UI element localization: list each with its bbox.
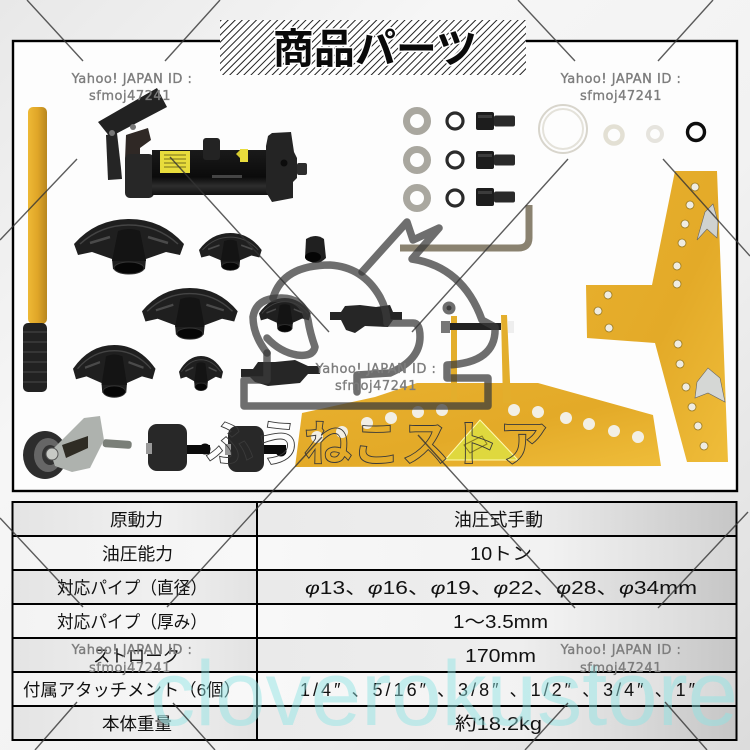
table values: 10トン (470, 544, 532, 564)
hydraulic cylinder pump (98, 88, 307, 202)
table labels: 本体重量 (102, 714, 172, 734)
parts photo panel (13, 41, 737, 491)
table values: 170mm (465, 646, 536, 666)
store name watermark: cloverokustore (150, 643, 738, 745)
table labels: 付属アタッチメント（6個） (23, 680, 241, 700)
Yahoo ID watermarks: Yahoo! JAPAN ID : (315, 362, 436, 377)
Yahoo ID watermarks (71, 72, 681, 676)
clear seal rings (539, 105, 704, 153)
bushing (305, 236, 326, 263)
Yahoo ID watermarks: sfmoj47241 (89, 661, 171, 676)
washers o-rings bolts (406, 110, 515, 208)
table labels: 対応パイプ（直径） (57, 578, 207, 598)
handle bar (23, 107, 47, 392)
Yahoo ID watermarks: sfmoj47241 (89, 89, 171, 104)
table labels: ストローク (93, 646, 180, 666)
Yahoo ID watermarks: Yahoo! JAPAN ID : (71, 72, 192, 87)
roller wheels (146, 424, 286, 472)
caster wheel (23, 416, 132, 479)
T-shaped yellow plate (586, 171, 728, 462)
table values: 約18.2kg (455, 714, 542, 734)
hex key (400, 205, 529, 248)
store name outline watermark: ふうねこストア (205, 418, 548, 472)
Yahoo ID watermarks: sfmoj47241 (580, 89, 662, 104)
bending dies (73, 219, 311, 397)
bracket base plate (295, 315, 661, 467)
spec table (12, 502, 737, 740)
Yahoo ID watermarks: sfmoj47241 (580, 661, 662, 676)
Yahoo ID watermarks: Yahoo! JAPAN ID : (71, 643, 192, 658)
table values (300, 510, 697, 734)
table values: φ13、 φ16、 φ19、 φ22、 φ28、 φ34mm (305, 578, 697, 598)
table values: 1～3.5mm (453, 612, 548, 632)
table values: 1/4″ 、5/16″ 、3/8″ 、1/2″ 、3/4″ 、1″ (300, 680, 696, 700)
table labels: 油圧能力 (102, 544, 173, 564)
triangle sticker (445, 420, 518, 460)
table labels (23, 510, 241, 734)
Yahoo ID watermarks: Yahoo! JAPAN ID : (560, 643, 681, 658)
Yahoo ID watermarks: Yahoo! JAPAN ID : (560, 72, 681, 87)
Yahoo ID watermarks: sfmoj47241 (335, 379, 417, 394)
title band: 商品パーツ (273, 26, 477, 72)
cat logo watermark (244, 222, 495, 406)
table labels: 原動力 (110, 510, 163, 530)
roller connectors (241, 305, 402, 386)
title band (220, 20, 526, 75)
table values: 油圧式手動 (454, 510, 543, 530)
table labels: 対応パイプ（厚み） (57, 612, 207, 632)
